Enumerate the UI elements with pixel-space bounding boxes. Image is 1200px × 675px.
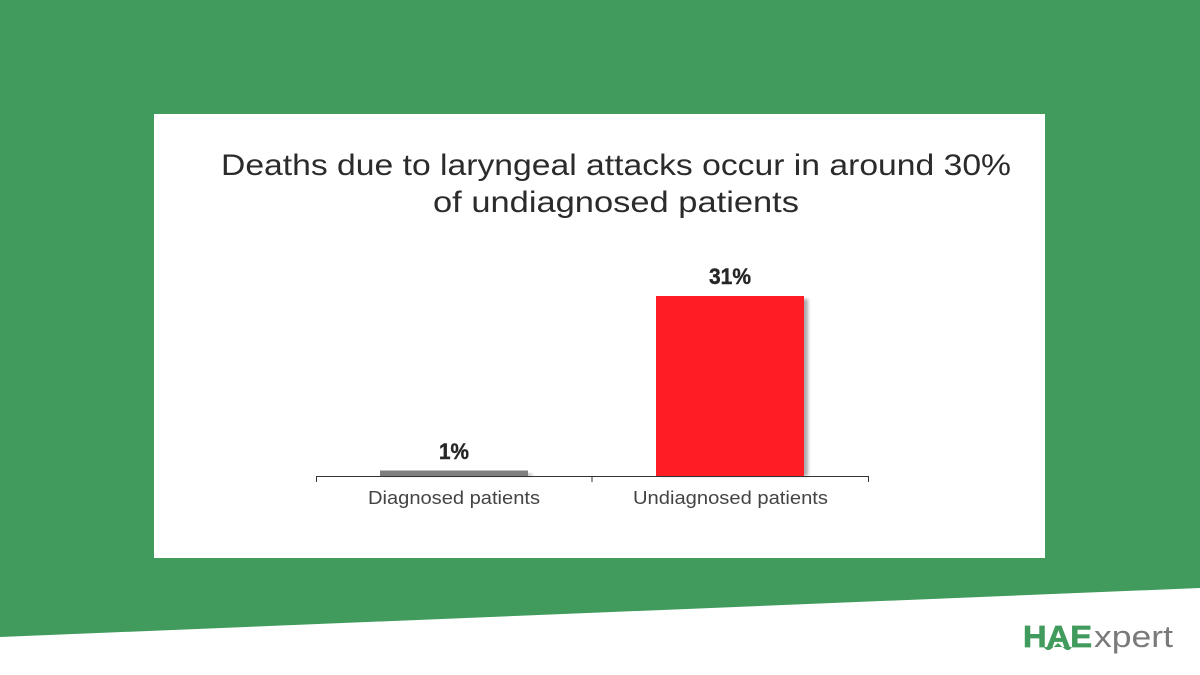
axis [316,476,868,482]
logo: HAExpert: xpert [1094,619,1173,654]
logo: HAExpert [1023,619,1173,654]
bar: diagnosed patients 1% [380,470,532,477]
value label: 31%: 31% [709,264,751,289]
category label: diagnosed: Diagnosed patients [368,488,540,508]
bar: undiagnosed patients 31% [656,296,808,476]
white content panel [154,114,1045,558]
title: of undiagnosed patients [433,186,799,219]
value label: 1%: 1% [439,439,469,464]
logo: HAExpert: HAE [1023,619,1092,654]
title: Deaths due to laryngeal attacks occur in around 30% [221,149,1011,182]
bar chart [316,264,868,508]
category label: undiagnosed: Undiagnosed patients [633,488,828,508]
title [221,149,1011,219]
